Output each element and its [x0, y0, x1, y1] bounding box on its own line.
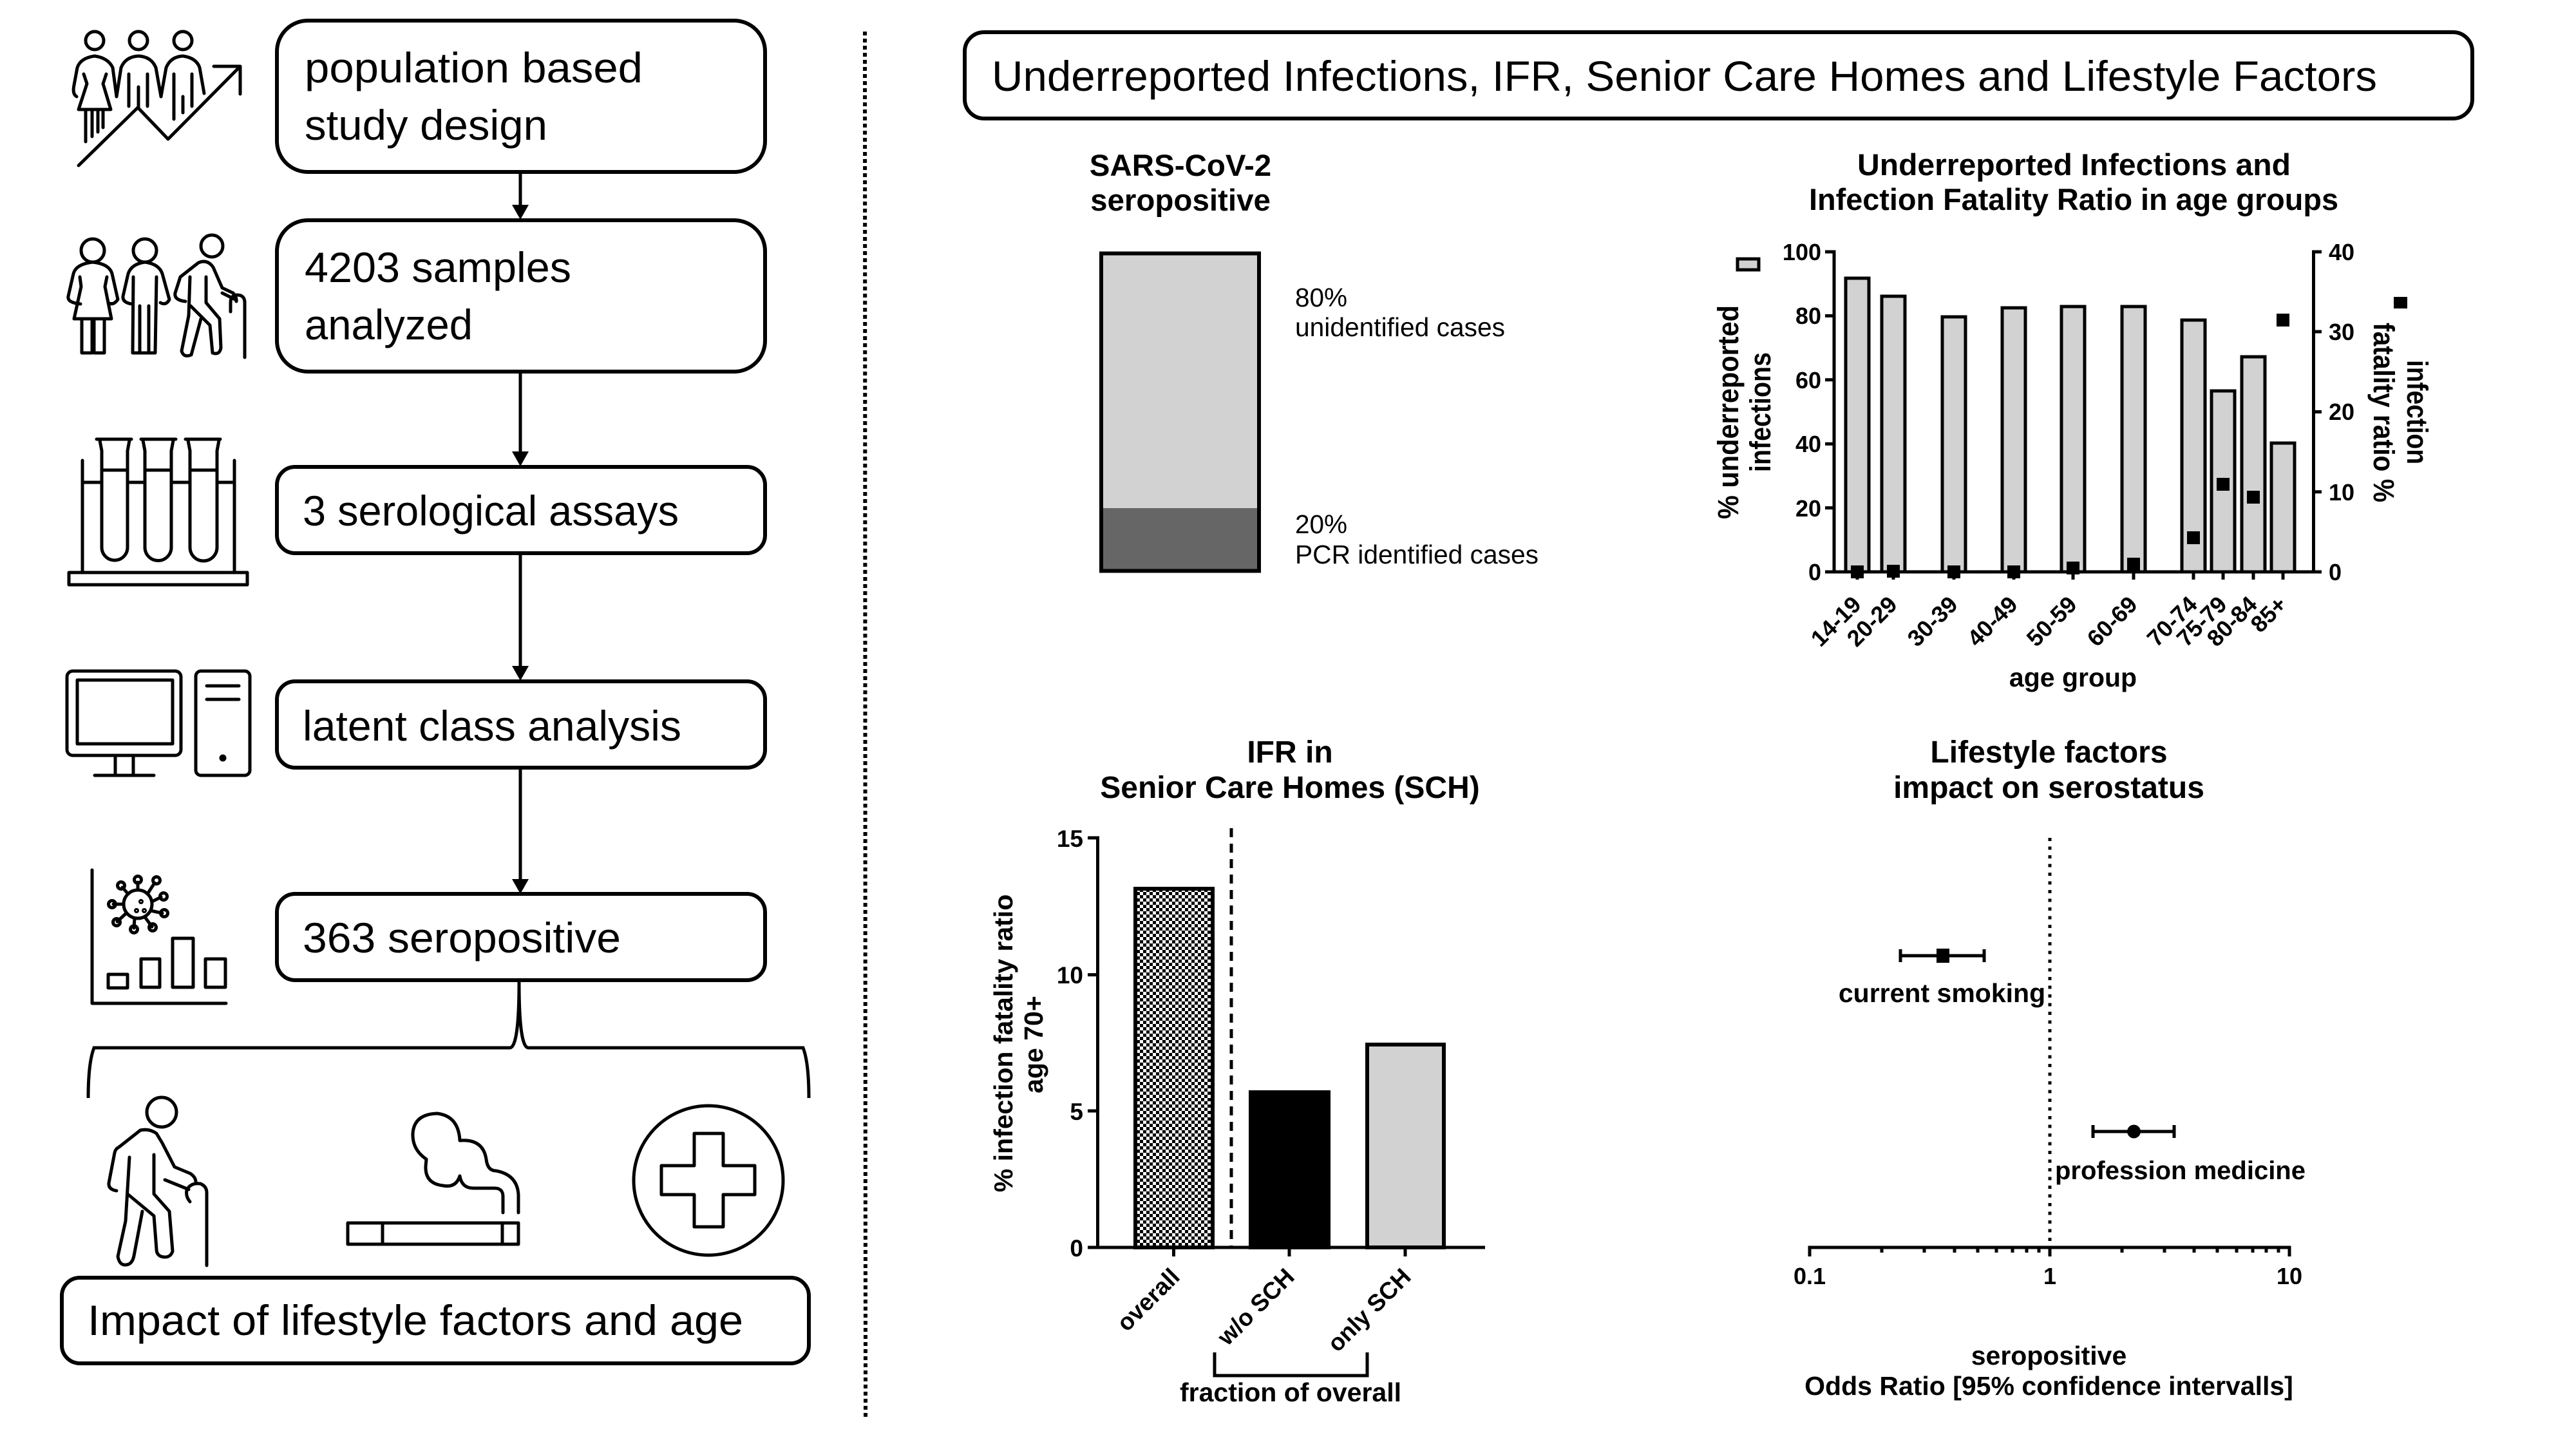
heading: IFR in Senior Care Homes: Senior Care Homes (SCH) [1100, 771, 1480, 805]
y axis title line: percent infection fatality ratio: % infection fatality ratio [989, 895, 1018, 1192]
icon: elderly person with cane [109, 1097, 207, 1265]
label: PCR identified cases: PCR identified cases [1295, 540, 1539, 569]
icon: desktop computer [67, 671, 250, 775]
left axis numbers: 60 [1795, 367, 1821, 393]
category labels [1112, 1264, 1416, 1357]
y axis numbers [1057, 826, 1083, 1262]
y axis numbers: 15 [1057, 826, 1083, 852]
current smoking estimate [1900, 949, 1984, 963]
y axis title line: age 70+: age 70+ [1019, 996, 1048, 1094]
right axis numbers: 10 [2329, 479, 2354, 506]
arrow: samples to assays [512, 372, 529, 466]
age group tick labels: 85+ [2245, 591, 2292, 638]
right axis numbers: 0 [2329, 559, 2342, 585]
y axis numbers: 5 [1070, 1099, 1083, 1125]
icon: population with rising arrow [73, 32, 240, 166]
log x axis [1810, 1247, 2289, 1256]
dashed separator [1230, 828, 1233, 1247]
bars: percent underreported [1846, 278, 2295, 572]
bars: overall, without SCH, only SCH [1135, 889, 1444, 1247]
box: population based study design: study design [305, 101, 547, 149]
category labels: only SCH [1322, 1264, 1416, 1357]
y axis numbers: 10 [1057, 962, 1083, 989]
label: PCR identified cases: 20% [1295, 509, 1347, 539]
label: profession medicine: profession medicine [2055, 1157, 2306, 1185]
age group tick labels: 80-84 [2202, 591, 2262, 652]
heading: lifestyle factors impact on serostatus: Lifestyle factors [1930, 735, 2168, 770]
label: unidentified cases: 80% [1295, 283, 1347, 312]
axes and ticks [1825, 252, 2322, 580]
x axis numbers: 1 [2043, 1263, 2056, 1289]
icon: test tubes in a rack [69, 439, 247, 585]
heading: underreported infections and IFR: Infection Fatality Ratio in age groups [1809, 183, 2338, 217]
right axis numbers [2329, 239, 2354, 585]
arrow: assays to latent class analysis [512, 553, 529, 681]
box: latent class analysis: latent class analysis [303, 702, 681, 750]
panel: underreported infections and IFR by age [1712, 148, 2434, 692]
age group tick labels: 14-19 [1806, 591, 1866, 652]
right axis title and legend marker [2367, 297, 2434, 502]
box: population based study design [277, 21, 765, 172]
category labels: overall [1112, 1264, 1185, 1336]
arrow: design to samples [512, 172, 529, 220]
left axis title and legend swatch [1712, 259, 1777, 519]
category labels: w/o SCH [1212, 1264, 1300, 1350]
box: 4203 samples analyzed [277, 220, 765, 372]
right axis numbers: 40 [2329, 239, 2354, 265]
age group tick labels: 50-59 [2022, 591, 2082, 652]
y axis numbers: 0 [1070, 1235, 1083, 1262]
bracket: fraction of overall [1180, 1352, 1401, 1407]
left axis title and legend swatch: % underreported [1712, 305, 1745, 519]
arrow: analysis to seropositive [512, 768, 529, 894]
bracket: fraction of overall: fraction of overall [1180, 1378, 1401, 1407]
box: 363 seropositive: 363 seropositive [303, 914, 621, 961]
left axis numbers: 100 [1783, 239, 1821, 265]
label: current smoking: current smoking [1839, 978, 2045, 1008]
panel: lifestyle factors forest plot [1794, 735, 2306, 1401]
left axis numbers: 20 [1795, 495, 1821, 522]
x axis title: seropositive [1971, 1341, 2126, 1370]
left axis numbers [1783, 239, 1821, 585]
panel: seropositive stacked bar [1090, 149, 1539, 571]
panel: IFR in senior care homes [989, 735, 1485, 1407]
age group tick labels: 20-29 [1842, 591, 1902, 652]
heading: lifestyle factors impact on serostatus: impact on serostatus [1893, 771, 2204, 805]
box: latent class analysis [277, 681, 765, 768]
box: 363 seropositive [277, 894, 765, 980]
reference line at odds ratio 1 [2048, 838, 2052, 1247]
left axis numbers: 80 [1795, 303, 1821, 329]
age group tick labels: 60-69 [2082, 591, 2143, 652]
heading: underreported infections and IFR: Underreported Infections and [1857, 148, 2291, 182]
age group tick labels: 40-49 [1962, 591, 2023, 652]
x axis title: age group: age group [2009, 663, 2137, 692]
profession medicine estimate [2093, 1124, 2174, 1139]
left axis title and legend swatch: infections [1744, 352, 1777, 472]
right axis numbers: 20 [2329, 399, 2354, 425]
heading: IFR in Senior Care Homes: IFR in [1247, 735, 1333, 770]
title box [965, 32, 2472, 118]
age group tick labels: 70-74 [2142, 591, 2202, 652]
axes and ticks [1088, 838, 1485, 1256]
right axis numbers: 30 [2329, 319, 2354, 345]
right axis title and legend marker: infection [2401, 360, 2434, 464]
stacked bar: 80% and 20% [1101, 253, 1259, 571]
right axis title and legend marker: fatality ratio % [2367, 323, 2400, 502]
box: impact of lifestyle factors and age [62, 1278, 809, 1363]
box: population based study design: population based [305, 44, 643, 91]
heading: SARS-CoV-2 seropositive: SARS-CoV-2 [1090, 149, 1271, 183]
icon: man woman elderly [68, 235, 245, 357]
icon: virus over bar chart [92, 870, 226, 1003]
left axis numbers: 0 [1808, 559, 1821, 585]
icon: cigarette with smoke [348, 1113, 518, 1244]
box: 4203 samples analyzed: analyzed [305, 301, 473, 348]
box: impact of lifestyle factors and age: Impact of lifestyle factors and age [88, 1296, 743, 1344]
x axis numbers: 10 [2277, 1263, 2302, 1289]
age group tick labels [1806, 591, 2292, 652]
panel: study flowchart [62, 21, 809, 1363]
heading: SARS-CoV-2 seropositive: seropositive [1090, 184, 1271, 218]
left axis numbers: 40 [1795, 431, 1821, 457]
box: 4203 samples analyzed: 4203 samples [305, 243, 571, 291]
x axis title: Odds Ratio [95% confidence intervalls] [1804, 1371, 2293, 1401]
box: 3 serological assays [277, 467, 765, 553]
x axis numbers [1794, 1263, 2302, 1289]
label: unidentified cases: unidentified cases [1295, 312, 1505, 342]
icon: medical cross in circle [634, 1106, 783, 1255]
title box: Underreported Infections, IFR, Senior Care Homes and Lifestyle Factors [992, 52, 2377, 100]
age group tick labels: 75-79 [2172, 591, 2232, 652]
bracket: seropositive splits into factors [88, 982, 809, 1098]
markers: infection fatality ratio [1851, 314, 2289, 578]
age group tick labels: 30-39 [1902, 591, 1963, 652]
box: 3 serological assays: 3 serological assays [303, 487, 679, 535]
x axis numbers: 0.1 [1794, 1263, 1826, 1289]
